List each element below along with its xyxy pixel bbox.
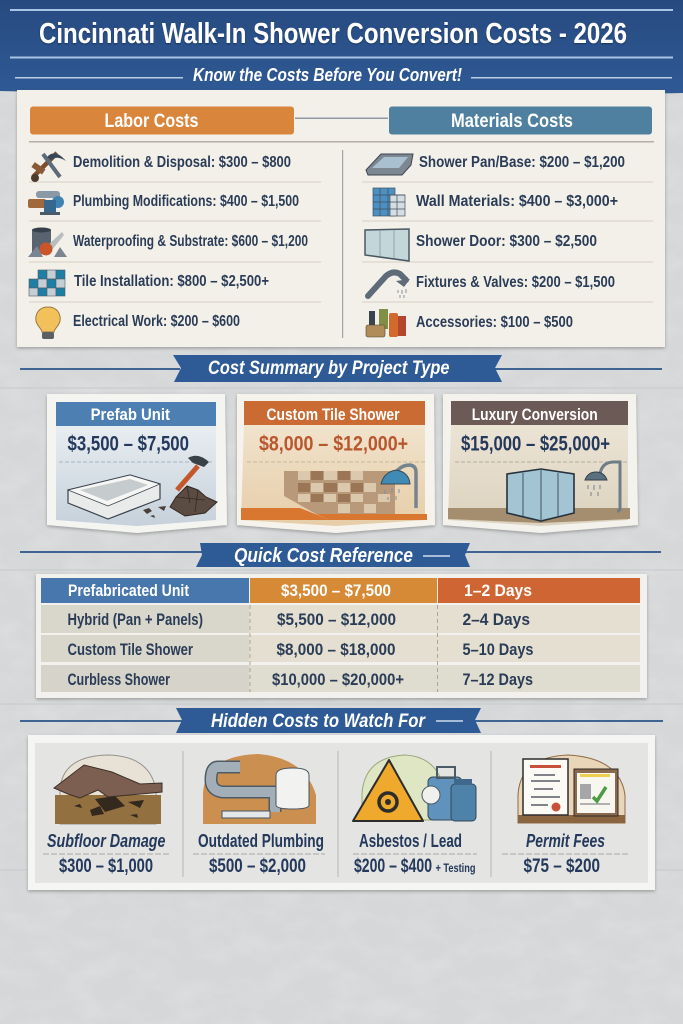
materials row: fixtures: [368, 272, 615, 298]
table row: custom tile: $8,000 – $18,000: [276, 640, 396, 659]
table header row: [41, 578, 640, 603]
table header row: 1–2 Days: [464, 581, 532, 600]
icon: old pipes and tank: [203, 754, 316, 824]
materials row: shower pan: Shower Pan/Base: $200 – $1,200: [419, 154, 625, 171]
table row: custom tile: Custom Tile Shower: [68, 640, 193, 659]
icon: shower pan: [366, 154, 413, 175]
icon: tile grid: [29, 270, 65, 296]
table header row: Prefabricated Unit: [68, 581, 189, 600]
table row: hybrid: 2–4 Days: [462, 610, 530, 629]
card: prefab unit: $3,500 – $7,500: [68, 432, 189, 456]
table row: custom tile: 5–10 Days: [462, 640, 534, 659]
labor row: waterproofing: [28, 228, 308, 257]
card: prefab unit: [47, 394, 227, 533]
card: custom tile shower: [237, 394, 435, 533]
card: luxury conversion: Luxury Conversion: [472, 405, 598, 424]
item: outdated plumbing: [193, 754, 325, 877]
labor costs heading: [30, 106, 294, 134]
section heading: hidden costs to watch for: Hidden Costs to Watch For: [211, 711, 426, 732]
icon: glass shower door: [365, 229, 409, 261]
labor row: waterproofing: Waterproofing & Substrate: $600 – $1,200: [73, 233, 308, 250]
icon: wall panels: [373, 188, 405, 216]
labor costs heading: Labor Costs: [104, 111, 198, 132]
table row: hybrid: Hybrid (Pan + Panels): [68, 610, 203, 629]
labor row: plumbing: [28, 191, 299, 215]
labor row: demolition: [31, 153, 291, 182]
table row: curbless: Curbless Shower: [68, 670, 170, 689]
materials row: fixtures: Fixtures & Valves: $200 – $1,500: [416, 274, 615, 291]
labor row: demolition: Demolition & Disposal: $300 – $800: [73, 154, 291, 171]
labor row: electrical: Electrical Work: $200 – $600: [73, 313, 240, 330]
table header row: $3,500 – $7,500: [281, 581, 391, 600]
illustration: bathtub and rubble: [68, 456, 217, 519]
labor row: tile installation: Tile Installation: $800 – $2,500+: [74, 273, 269, 290]
table row: custom tile: [41, 635, 640, 662]
materials row: accessories: [366, 309, 573, 337]
icon: broken subfloor: [54, 755, 162, 824]
table: quick cost reference: [36, 574, 647, 698]
materials row: shower door: [365, 229, 597, 261]
table row: hybrid: $5,500 – $12,000: [277, 610, 396, 629]
table row: curbless: [41, 665, 640, 692]
illustration: tiled wall and shower: [241, 465, 427, 520]
item: permit fees: $75 – $200: [524, 856, 600, 877]
section heading: cost summary by project type: Cost Summary by Project Type: [208, 358, 450, 379]
panel: hidden costs: [28, 735, 655, 890]
labor row: electrical: [36, 307, 240, 339]
materials row: shower door: Shower Door: $300 – $2,500: [416, 233, 597, 250]
icon: light bulb: [36, 307, 60, 339]
table row: curbless: 7–12 Days: [462, 670, 533, 689]
item: subfloor damage: [43, 755, 171, 877]
item: subfloor damage: Subfloor Damage: [47, 831, 166, 851]
table row: curbless: $10,000 – $20,000+: [272, 670, 404, 689]
icon: waterproofing bucket and trowel: [28, 228, 67, 257]
materials row: shower pan: [366, 154, 625, 175]
panel: labor and materials costs: [17, 90, 665, 347]
materials row: wall materials: Wall Materials: $400 – $3,000+: [416, 193, 618, 210]
subtitle: Know the Costs Before You Convert!: [193, 65, 462, 85]
card: prefab unit: Prefab Unit: [91, 405, 170, 424]
item: permit fees: Permit Fees: [526, 831, 605, 851]
materials costs heading: [389, 106, 652, 134]
section heading: quick cost reference: [20, 543, 661, 567]
illustration: glass enclosure and shower: [448, 462, 630, 523]
icon: shower fixture: [368, 272, 410, 298]
labor row: tile installation: [29, 270, 269, 296]
labor row: plumbing: Plumbing Modifications: $400 – $1,500: [73, 193, 299, 210]
materials costs heading: Materials Costs: [451, 111, 573, 132]
icon: hammer and pick: [31, 153, 66, 182]
materials row: wall materials: [373, 188, 618, 216]
item: asbestos / lead: [353, 755, 477, 877]
item: asbestos / lead: + Testing: [436, 861, 476, 875]
icon: bath accessories: [366, 309, 406, 337]
table row: hybrid: [41, 605, 640, 633]
item: asbestos / lead: Asbestos / Lead: [359, 831, 462, 851]
materials row: accessories: Accessories: $100 – $500: [416, 314, 573, 331]
header banner: [0, 0, 683, 96]
item: permit fees: [502, 755, 630, 877]
item: outdated plumbing: Outdated Plumbing: [198, 831, 324, 851]
icon: permit documents: [518, 755, 625, 823]
section heading: quick cost reference: Quick Cost Reference: [234, 545, 413, 567]
item: asbestos / lead: $200 – $400: [354, 856, 432, 877]
item: outdated plumbing: $500 – $2,000: [209, 856, 306, 877]
section heading: cost summary by project type: [20, 355, 662, 382]
card: custom tile shower: Custom Tile Shower: [266, 405, 400, 424]
card: luxury conversion: [443, 394, 638, 533]
icon: biohazard sign and containers: [353, 755, 476, 821]
section heading: hidden costs to watch for: [20, 708, 663, 733]
icon: plumbing tools: [28, 191, 64, 215]
card: custom tile shower: $8,000 – $12,000+: [259, 432, 408, 456]
item: subfloor damage: $300 – $1,000: [59, 856, 153, 877]
card: luxury conversion: $15,000 – $25,000+: [461, 432, 610, 456]
